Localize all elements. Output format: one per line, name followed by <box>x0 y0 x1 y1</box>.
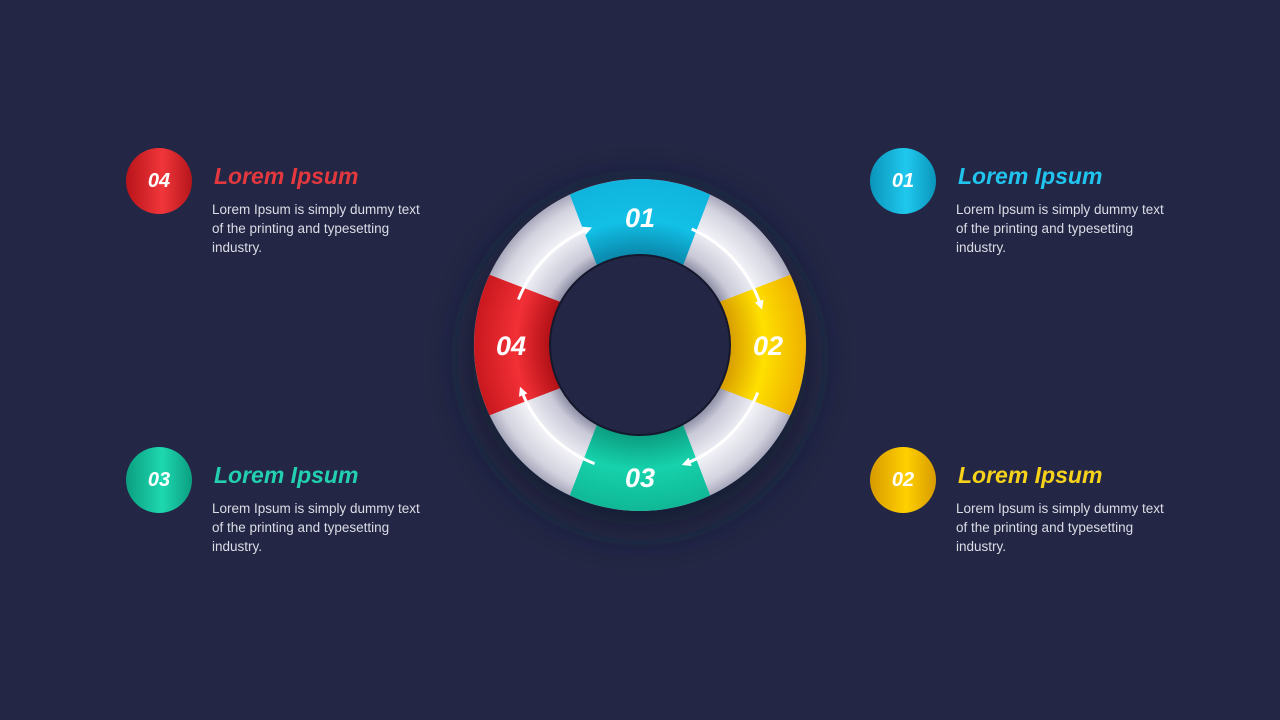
text 04: industry. <box>212 240 262 255</box>
arrows <box>518 229 761 464</box>
segment 02 <box>719 275 806 415</box>
segment labels: 04 <box>496 331 526 361</box>
icon: circle 01 <box>870 148 936 214</box>
item 01 <box>870 148 1164 255</box>
text 03: industry. <box>212 539 262 554</box>
text 02: industry. <box>956 539 1006 554</box>
text 03 <box>212 501 420 554</box>
icon: circle 02 <box>870 447 936 513</box>
segment labels: 02 <box>753 331 783 361</box>
segment labels <box>496 203 783 493</box>
text 02: Lorem Ipsum is simply dummy text <box>956 501 1164 516</box>
text 04: of the printing and typesetting <box>212 221 389 236</box>
segment 04 <box>474 275 561 415</box>
title 04: Lorem Ipsum <box>214 163 358 189</box>
text 01 <box>956 202 1164 255</box>
icon: circle 03: 03 <box>148 469 170 491</box>
item 03 <box>126 447 420 554</box>
icon: circle 01: 01 <box>892 170 914 192</box>
title 01: Lorem Ipsum <box>958 163 1102 189</box>
title 02: Lorem Ipsum <box>958 462 1102 488</box>
segment labels: 03 <box>625 463 655 493</box>
icon: circle 04: 04 <box>148 170 170 192</box>
text 03: Lorem Ipsum is simply dummy text <box>212 501 420 516</box>
icon: circle 04 <box>126 148 192 214</box>
text 02: of the printing and typesetting <box>956 520 1133 535</box>
item 02 <box>870 447 1164 554</box>
segment labels: 01 <box>625 203 655 233</box>
item 04 <box>126 148 420 255</box>
segment 03 <box>570 424 710 511</box>
icon: circle 03 <box>126 447 192 513</box>
text 01: Lorem Ipsum is simply dummy text <box>956 202 1164 217</box>
text 03: of the printing and typesetting <box>212 520 389 535</box>
ring body <box>474 179 806 511</box>
title 03: Lorem Ipsum <box>214 462 358 488</box>
icon: circle 02: 02 <box>892 469 914 491</box>
text 01: of the printing and typesetting <box>956 221 1133 236</box>
text 04 <box>212 202 420 255</box>
segment 01 <box>570 179 710 266</box>
text 01: industry. <box>956 240 1006 255</box>
text 02 <box>956 501 1164 554</box>
text 04: Lorem Ipsum is simply dummy text <box>212 202 420 217</box>
